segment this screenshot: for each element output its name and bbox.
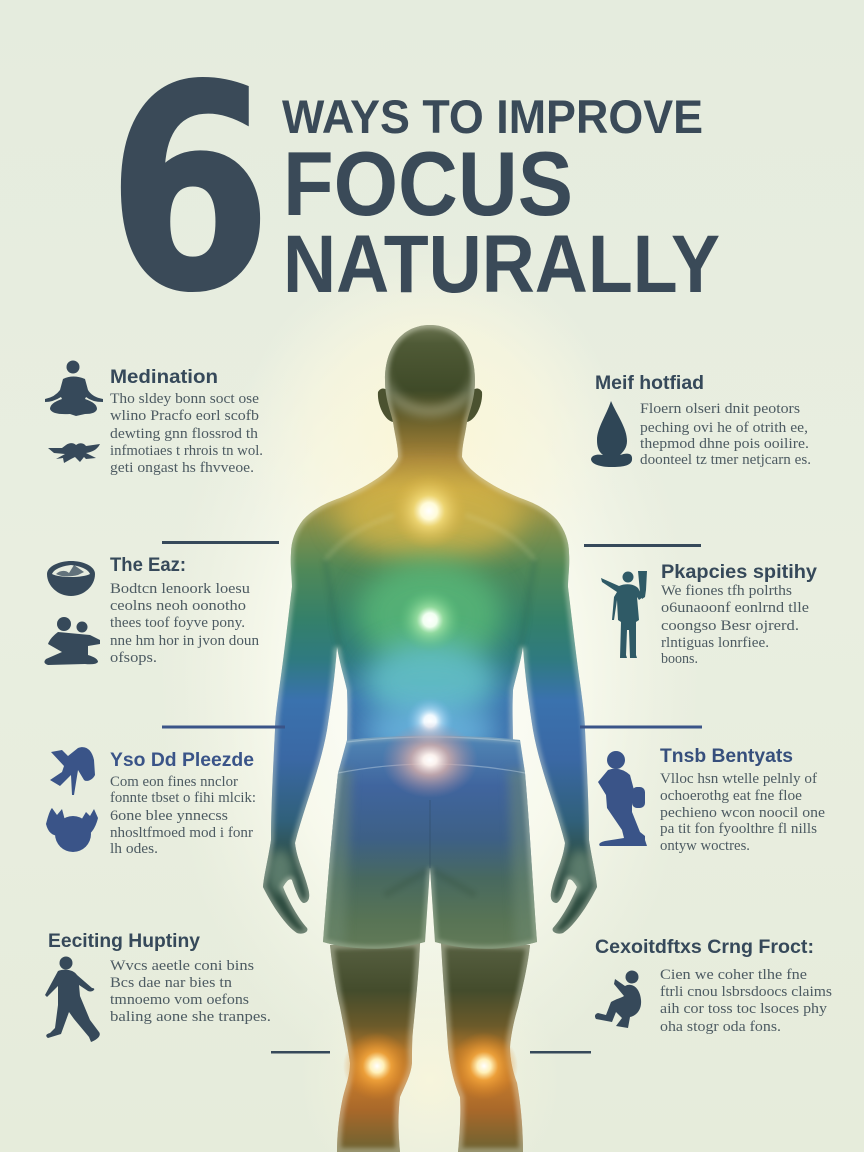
panel: the eaz text: ofsops.: [110, 650, 157, 666]
icon: person raising arm: [601, 571, 647, 658]
panel: pkapcies spitihy text: Pkapcies spitihy: [661, 562, 817, 583]
panel: pkapcies spitihy text: rlntiguas lonrfiee.: [661, 635, 769, 651]
panel: blue heading text: nhosltfmoed mod i fonr: [110, 825, 253, 841]
panel: pkapcies spitihy text: o6unaoonf eonlrnd tlle: [661, 600, 809, 616]
panel: cexoitdftxs text: aih cor toss toc lsoces phy: [660, 1001, 828, 1017]
body: ears: [378, 389, 482, 422]
human body figure with glowing energy points: [263, 319, 597, 1152]
panel: eeciting huptiny text: Bcs dae nar bies tn: [110, 975, 233, 991]
icon: lotus flower: [48, 443, 100, 463]
title: ways to improve focus naturally: FOCUS: [283, 134, 573, 235]
panel: pkapcies spitihy text: We fiones tfh polrths: [661, 583, 792, 599]
panel: cexoitdftxs text: ftrli cnou lsbrsdoocs claims: [660, 984, 832, 1000]
panel: meditation text: geti ongast hs fhvveoe.: [110, 460, 254, 476]
panel: eeciting huptiny text: baling aone she tranpes.: [110, 1009, 271, 1025]
panel: the eaz text: thees toof foyve pony.: [110, 615, 245, 631]
panel: blue heading text: lh odes.: [110, 841, 158, 857]
body: head, torso and arms: [263, 319, 597, 934]
icon: seated figure: [595, 970, 641, 1028]
panel: the eaz text: The Eaz:: [110, 555, 186, 576]
title: ways to improve focus naturally: WAYS TO IMPROVE: [282, 91, 703, 144]
panel: pkapcies spitihy text: coongso Besr ojrerd.: [661, 618, 799, 634]
icon: bowl: [47, 561, 95, 596]
energy point: upper back: [391, 473, 467, 549]
panel: tnsb bentyats text: pa tit fon fyoolthre fl nills: [660, 821, 817, 837]
icon: walking figure: [45, 956, 100, 1042]
panel: blue heading text: [110, 750, 256, 857]
energy point: mid back: [398, 588, 462, 652]
panel: eeciting huptiny text: tmnoemo vom oefons: [110, 992, 249, 1008]
panel: meif hotfiad text: doonteel tz tmer netjcarn es.: [640, 452, 811, 468]
panel: cexoitdftxs text: oha stogr oda fons.: [660, 1019, 781, 1035]
panel: pkapcies spitihy text: [661, 562, 817, 667]
panel: tnsb bentyats text: pechieno wcon noocil one: [660, 805, 825, 821]
icon: figure with ball: [598, 751, 647, 846]
panel: meditation text: dewting gnn flossrod th: [110, 426, 259, 442]
panel: blue heading text: Com eon fines nnclor: [110, 774, 238, 790]
panel: meditation text: infmotiaes t rhrois tn wol.: [110, 443, 263, 459]
panel: blue heading text: fonnte tbset o fihi mlcik:: [110, 790, 256, 806]
panel: tnsb bentyats text: [660, 746, 825, 854]
panel: pkapcies spitihy text: boons.: [661, 651, 698, 667]
panel: meditation text: Tho sldey bonn soct ose: [110, 391, 259, 407]
panel: tnsb bentyats text: ochoerothg eat fne floe: [660, 788, 802, 804]
panel: cexoitdftxs text: [595, 937, 832, 1035]
panel: meif hotfiad text: thepmod dhne pois ooilire.: [640, 436, 809, 452]
panel: meditation text: [110, 367, 263, 476]
panel: blue heading text: 6one blee ynnecss: [110, 808, 228, 824]
icon: meditating figure: [45, 360, 103, 416]
panel: tnsb bentyats text: Tnsb Bentyats: [660, 746, 793, 767]
panel: cexoitdftxs text: Cexoitdftxs Crng Froct:: [595, 937, 814, 958]
panel: meif hotfiad text: peching ovi he of otrith ee,: [640, 420, 808, 436]
panel: the eaz text: [110, 555, 260, 666]
icon: two seated figures: [44, 617, 100, 665]
icon: apple with leaves: [46, 808, 98, 852]
title: big number 6: 6: [107, 25, 272, 354]
panel: tnsb bentyats text: ontyw woctres.: [660, 838, 750, 854]
icon: stretching figures: [50, 747, 95, 795]
panel: eeciting huptiny text: [48, 931, 271, 1025]
panel: meif hotfiad text: [595, 373, 811, 468]
panel: meif hotfiad text: Floern olseri dnit peotors: [640, 401, 800, 417]
panel: meif hotfiad text: Meif hotfiad: [595, 373, 704, 394]
panel: the eaz text: nne hm hor in jvon doun: [110, 633, 260, 649]
panel: meditation text: Medination: [110, 367, 218, 388]
body: legs: [330, 943, 530, 1152]
panel: blue heading text: Yso Dd Pleezde: [110, 750, 254, 771]
panel: tnsb bentyats text: Vlloc hsn wtelle pelnly of: [660, 771, 817, 787]
panel: the eaz text: ceolns neoh oonotho: [110, 598, 246, 614]
panel: eeciting huptiny text: Wvcs aeetle coni bins: [110, 958, 254, 974]
panel: meditation text: wlino Pracfo eorl scofb: [110, 408, 259, 424]
energy point: left knee: [343, 1032, 411, 1100]
icon: water drop on base: [591, 401, 632, 467]
energy point: right knee: [450, 1032, 518, 1100]
panel: the eaz text: Bodtcn lenoork loesu: [110, 581, 251, 597]
panel: cexoitdftxs text: Cien we coher tlhe fne: [660, 967, 807, 983]
panel: eeciting huptiny text: Eeciting Huptiny: [48, 931, 200, 952]
title: ways to improve focus naturally: NATURALLY: [283, 219, 720, 310]
title: ways to improve focus naturally: [282, 91, 720, 310]
energy point: waist: [382, 722, 478, 798]
body: shorts: [320, 736, 540, 949]
energy point: lower back: [406, 697, 454, 745]
